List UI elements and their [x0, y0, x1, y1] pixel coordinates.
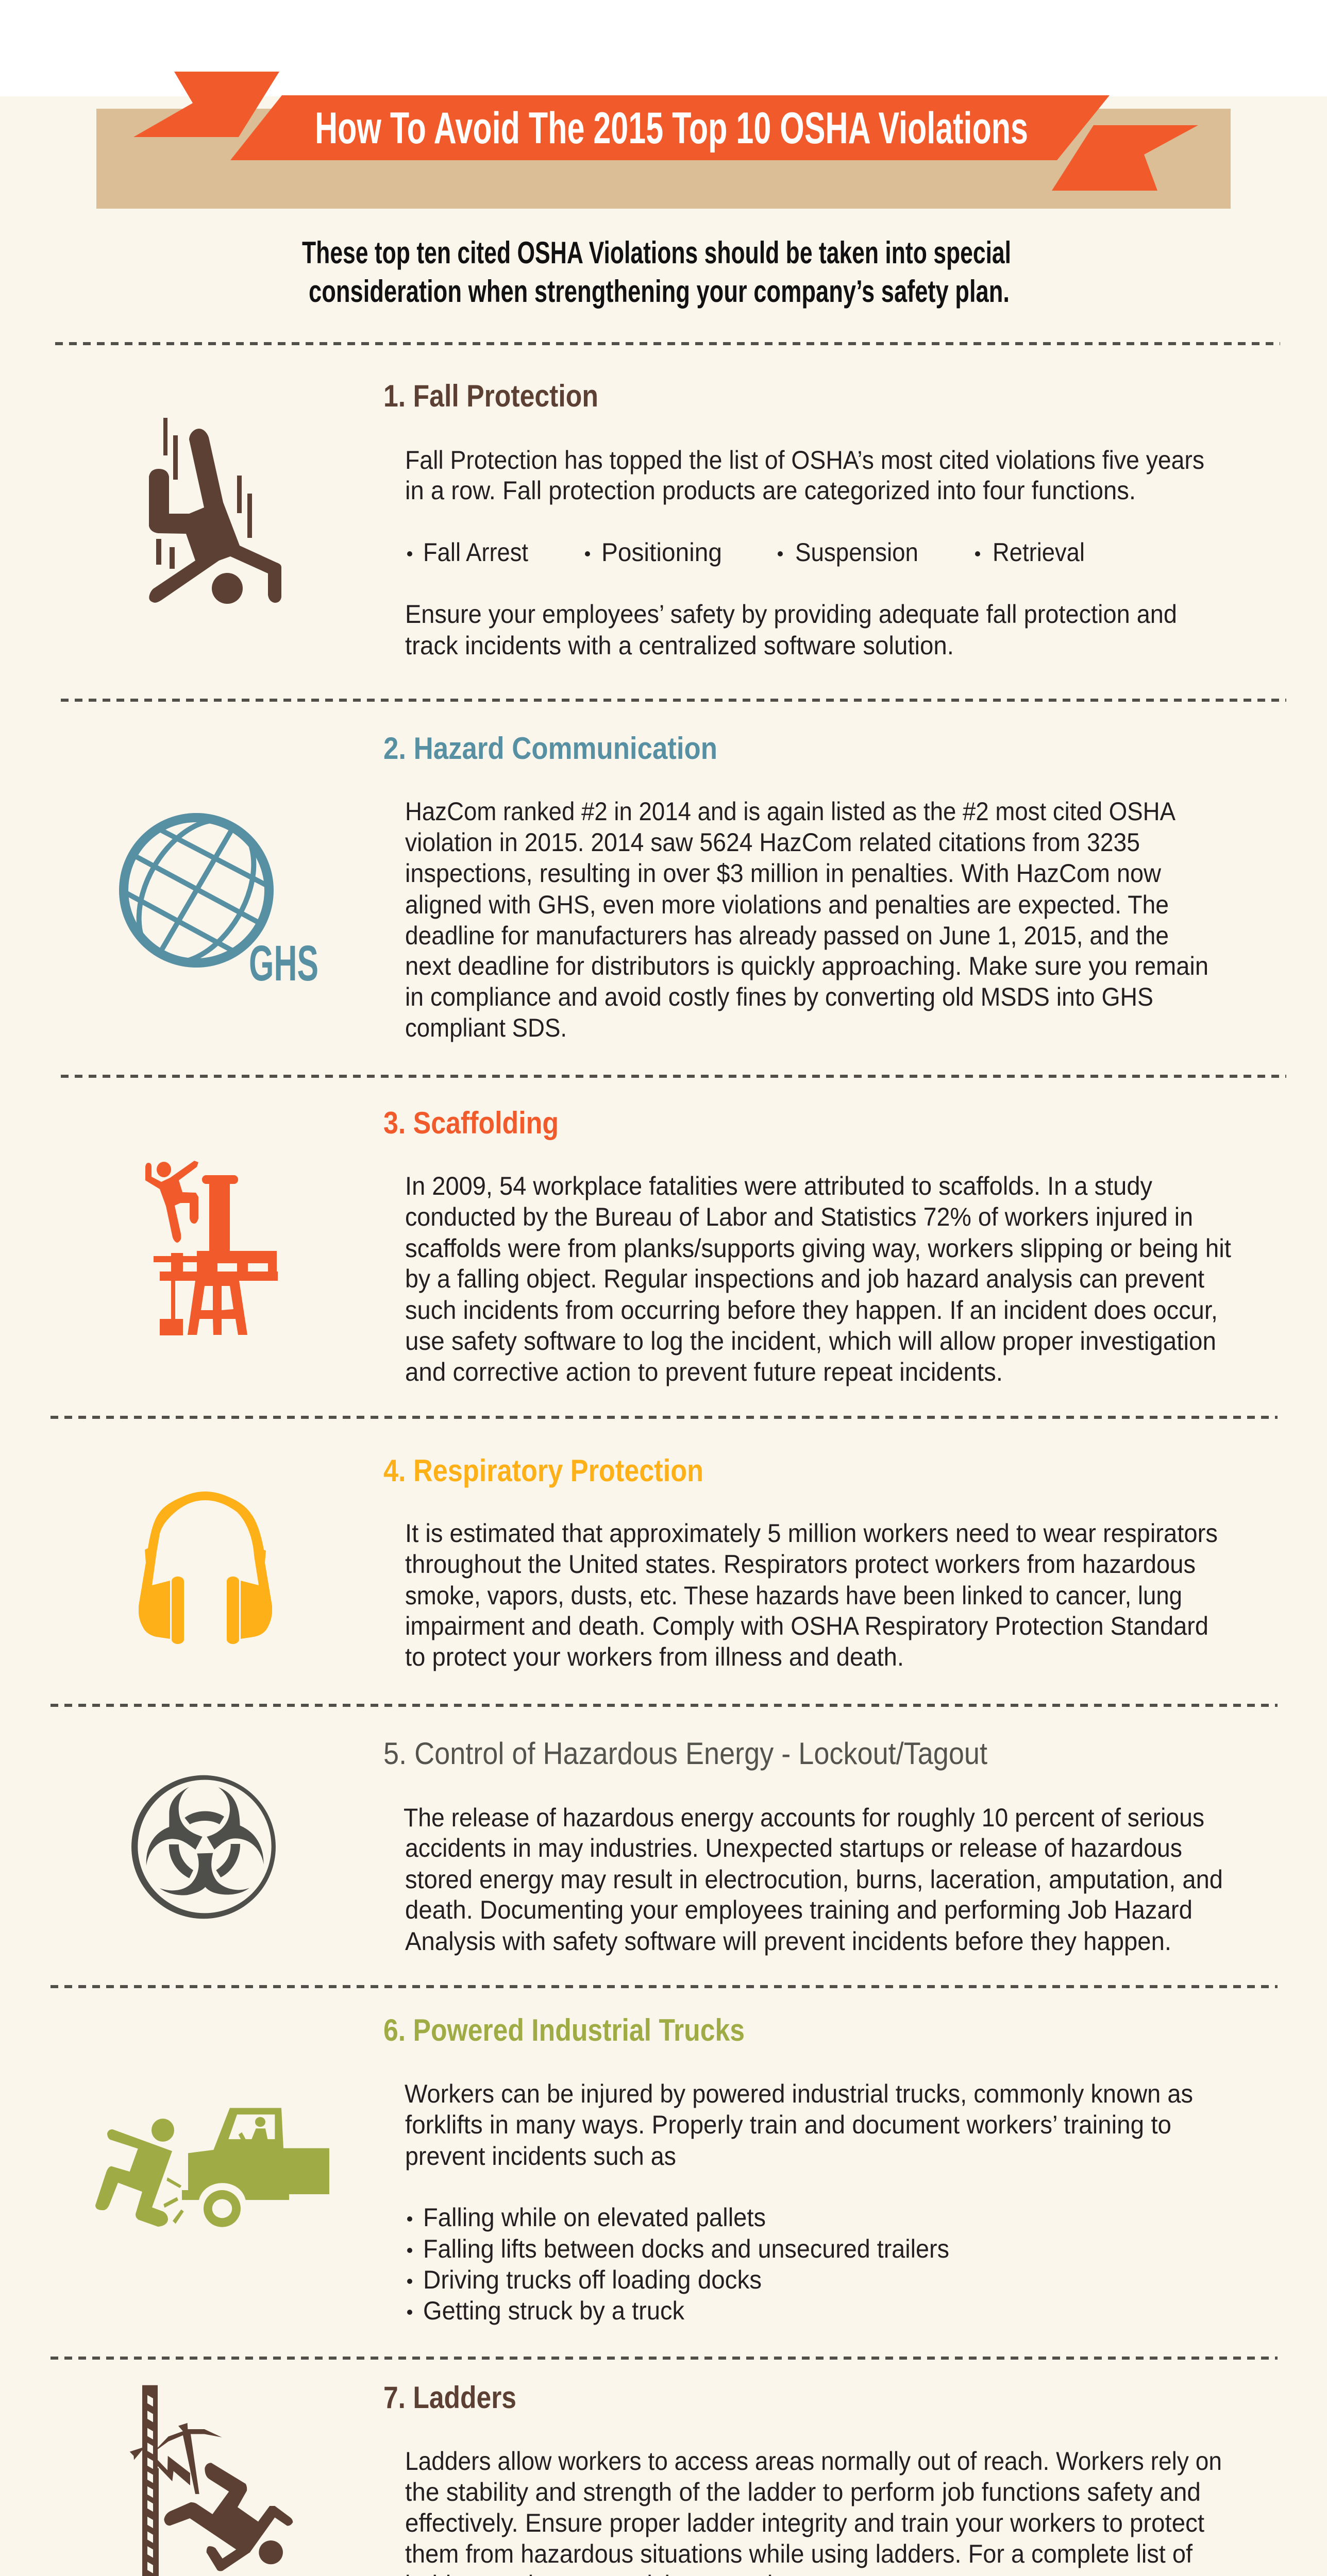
panel: 5 control of hazardous energy	[131, 1736, 1223, 1956]
text block	[404, 1803, 1223, 1956]
text block: In 2009, 54 workplace fatalities were attributed to scaffolds. In a study	[405, 1172, 1152, 1200]
text block	[405, 1519, 1218, 1671]
text block: HazCom ranked #2 in 2014 and is again listed as the #2 most cited OSHA	[405, 797, 1176, 826]
icon: biohazard	[131, 1775, 276, 1919]
icon: GHS globe	[115, 800, 318, 991]
text block	[405, 446, 1204, 660]
text block	[405, 2447, 1222, 2576]
panel: 1 fall protection	[149, 379, 1204, 660]
panel: 3 scaffolding	[145, 1106, 1231, 1386]
banner backing panel	[96, 109, 1231, 209]
text block: scaffolds were from planks/supports giving way, workers slipping or being hit	[405, 1234, 1231, 1263]
text block: Getting struck by a truck	[423, 2296, 685, 2325]
text block: smoke, vapors, dusts, etc. These hazards have been linked to cancer, lung	[405, 1581, 1182, 1610]
text block: by a falling object. Regular inspections and job hazard analysis can prevent	[405, 1264, 1204, 1293]
text block: the stability and strength of the ladder to perform job functions safety and	[405, 2478, 1201, 2506]
text block: Positioning	[601, 538, 722, 567]
text block: Suspension	[795, 538, 918, 567]
text block: such incidents from occurring before they happen. If an incident does occur,	[405, 1296, 1218, 1325]
text block: conducted by the Bureau of Labor and Statistics 72% of workers injured in	[405, 1202, 1193, 1231]
heading: 6. Powered Industrial Trucks	[383, 2013, 745, 2047]
text block: track incidents with a centralized software solution.	[405, 631, 954, 660]
text block	[405, 797, 1208, 1042]
heading: 7. Ladders	[383, 2380, 516, 2415]
icon: ladder and falling worker	[130, 2385, 293, 2576]
text block: effectively. Ensure proper ladder integrity and train your workers to protect	[405, 2509, 1204, 2537]
text block: next deadline for distributors is quickly approaching. Make sure you remain	[405, 952, 1208, 980]
heading: 5. Control of Hazardous Energy - Lockout/Tagout	[383, 1736, 987, 1771]
ribbon right tail	[1052, 125, 1198, 191]
icon: falling worker	[149, 418, 281, 604]
text block: forklifts in many ways. Properly train and document workers’ training to	[405, 2110, 1171, 2139]
text block: throughout the United states. Respirators protect workers from hazardous	[405, 1550, 1196, 1579]
text block: stored energy may result in electrocution, burns, laceration, amputation, and	[405, 1865, 1223, 1894]
icon: scaffold fall	[145, 1161, 278, 1335]
ribbon main	[230, 95, 1110, 160]
intro text: consideration when strengthening your company’s safety plan.	[309, 274, 1010, 309]
text block: and corrective action to prevent future repeat incidents.	[405, 1358, 1003, 1386]
panel: 7 ladders	[130, 2380, 1222, 2576]
text block: violation in 2015. 2014 saw 5624 HazCom related citations from 3235	[405, 828, 1140, 857]
title banner	[96, 72, 1231, 209]
ribbon left tail	[133, 72, 279, 137]
title: How To Avoid The 2015 Top 10 OSHA Violations	[315, 104, 1028, 153]
text block: to protect your workers from illness and death.	[405, 1642, 904, 1671]
text block	[405, 2079, 1193, 2325]
text block: It is estimated that approximately 5 million workers need to wear respirators	[405, 1519, 1218, 1548]
text block: Falling lifts between docks and unsecured trailers	[423, 2234, 949, 2263]
icon: forklift striking worker	[95, 2108, 329, 2227]
text block: Ladders allow workers to access areas normally out of reach. Workers rely on	[405, 2447, 1222, 2476]
intro text	[302, 235, 1011, 309]
panel: 4 respiratory protection	[139, 1453, 1218, 1671]
text block: in a row. Fall protection products are categorized into four functions.	[405, 476, 1136, 505]
text block: Fall Protection has topped the list of OSHA’s most cited violations five years	[405, 446, 1204, 474]
icon: GHS globe: GHS	[249, 935, 318, 991]
heading: 4. Respiratory Protection	[383, 1453, 703, 1488]
text block: Retrieval	[993, 538, 1085, 567]
text block: Fall Arrest	[423, 538, 528, 567]
text block: Workers can be injured by powered industrial trucks, commonly known as	[405, 2079, 1193, 2108]
text block: prevent incidents such as	[405, 2142, 676, 2171]
text block: use safety software to log the incident, which will allow proper investigation	[405, 1327, 1216, 1355]
text block: in compliance and avoid costly fines by converting old MSDS into GHS	[405, 982, 1153, 1011]
text block: them from hazardous situations while using ladders. For a complete list of	[405, 2539, 1192, 2568]
text block	[405, 1172, 1231, 1386]
heading: 2. Hazard Communication	[383, 731, 717, 766]
text block: impairment and death. Comply with OSHA Respiratory Protection Standard	[405, 1612, 1208, 1640]
text block: The release of hazardous energy accounts for roughly 10 percent of serious	[404, 1803, 1204, 1832]
text block: Ensure your employees’ safety by providing adequate fall protection and	[405, 600, 1177, 629]
text block: death. Documenting your employees training and performing Job Hazard	[405, 1895, 1192, 1924]
text block: deadline for manufacturers has already passed on June 1, 2015, and the	[405, 921, 1169, 950]
panel: 6 powered industrial trucks	[95, 2013, 1193, 2325]
heading: 1. Fall Protection	[383, 379, 598, 413]
intro text: These top ten cited OSHA Violations should be taken into special	[302, 235, 1011, 270]
text block: Driving trucks off loading docks	[423, 2265, 762, 2294]
text block: aligned with GHS, even more violations and penalties are expected. The	[405, 890, 1169, 919]
text block: compliant SDS.	[405, 1013, 567, 1042]
panel: 2 hazard communication	[115, 731, 1208, 1042]
icon: ear protection headset	[139, 1492, 272, 1644]
heading: 3. Scaffolding	[383, 1106, 559, 1140]
text block: accidents in may industries. Unexpected startups or release of hazardous	[405, 1834, 1182, 1862]
text block: inspections, resulting in over $3 million in penalties. With HazCom now	[405, 859, 1162, 888]
text block: Falling while on elevated pallets	[423, 2203, 766, 2232]
text block: Analysis with safety software will prevent incidents before they happen.	[405, 1927, 1171, 1956]
